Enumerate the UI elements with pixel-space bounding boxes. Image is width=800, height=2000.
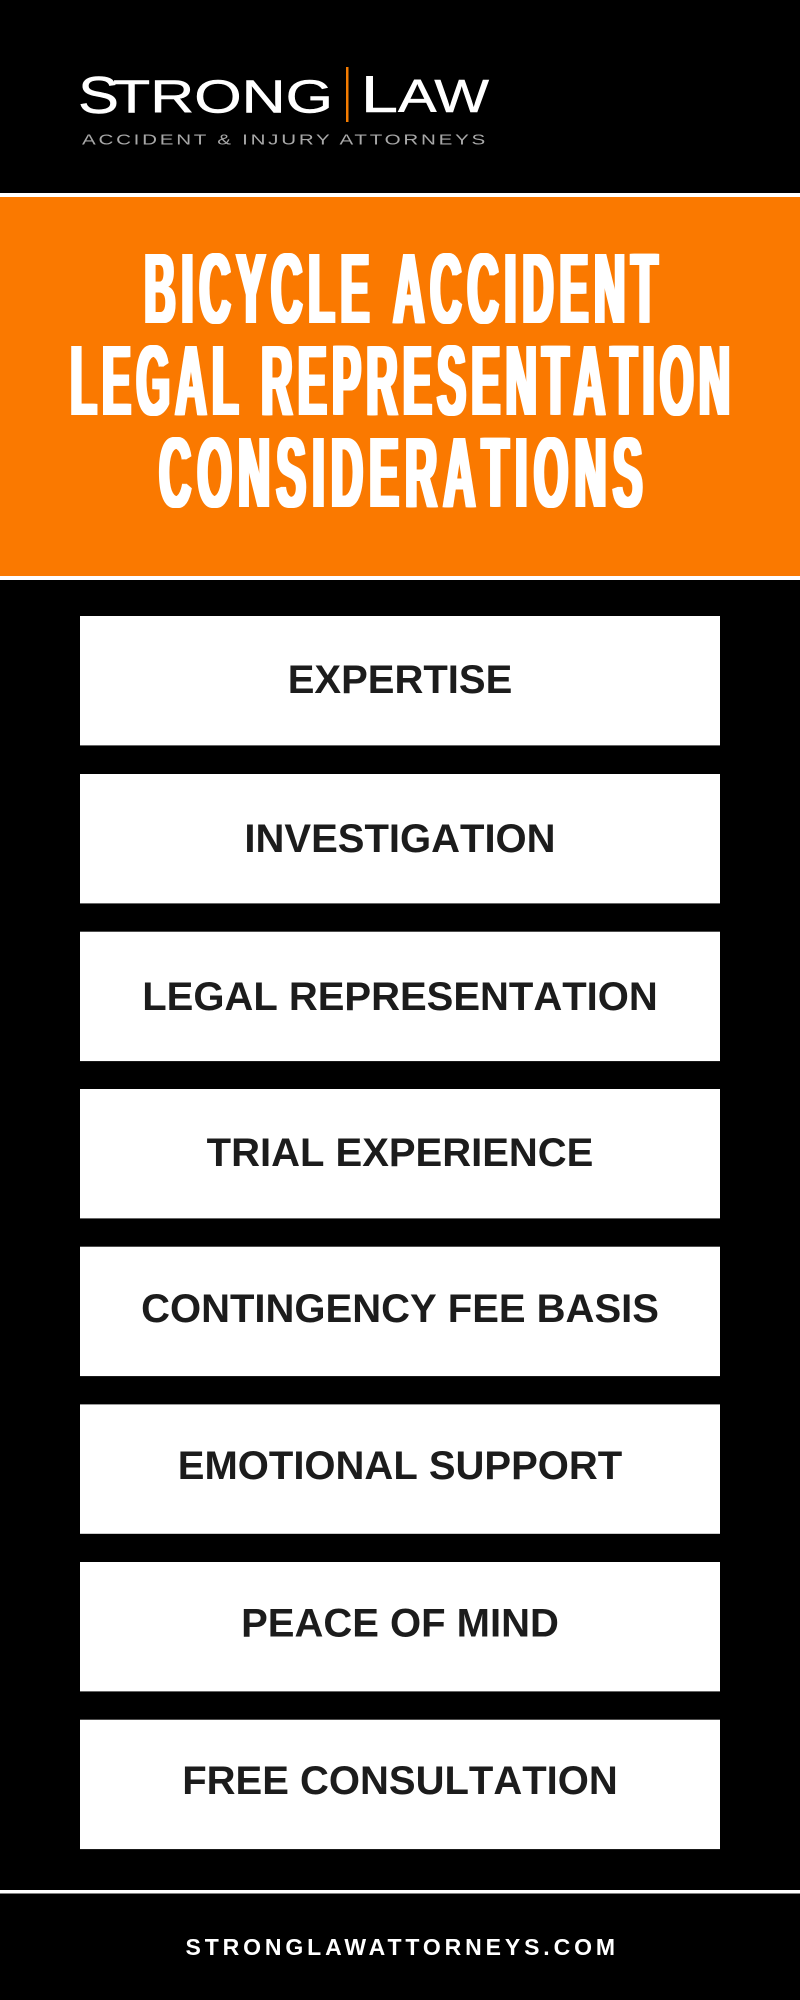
panel: emotional support: EMOTIONAL SUPPORT — [178, 1444, 622, 1488]
title — [70, 233, 735, 529]
footer website: STRONGLAWATTORNEYS.COM — [186, 1934, 615, 1960]
logo tagline: ACCIDENT & INJURY ATTORNEYS — [82, 132, 488, 148]
logo wordmark: Strong: TRONG — [113, 71, 333, 123]
title: CONSIDERATIONS — [159, 417, 649, 529]
title banner — [0, 193, 800, 580]
logo divider — [346, 67, 348, 122]
title: BICYCLE ACCIDENT — [145, 233, 664, 345]
panel: peace of mind: PEACE OF MIND — [241, 1602, 559, 1646]
panel: free consultation — [80, 1720, 720, 1849]
panel: investigation — [80, 774, 720, 903]
logo wordmark: Strong: S — [78, 67, 119, 125]
panel: free consultation: FREE CONSULTATION — [182, 1759, 618, 1803]
panel: trial experience: TRIAL EXPERIENCE — [207, 1131, 593, 1175]
panel: contingency fee basis — [80, 1247, 720, 1376]
panel: investigation: INVESTIGATION — [244, 817, 556, 861]
panel: trial experience — [80, 1089, 720, 1218]
panel: contingency fee basis: CONTINGENCY FEE BASIS — [141, 1287, 659, 1331]
panel: emotional support — [80, 1404, 720, 1534]
panel: expertise: EXPERTISE — [288, 658, 512, 702]
title: LEGAL REPRESENTATION — [70, 325, 735, 437]
panel: peace of mind — [80, 1562, 720, 1691]
logo wordmark: Law: L — [361, 66, 398, 124]
logo wordmark: Law — [361, 66, 490, 124]
logo wordmark: Strong — [78, 67, 333, 125]
panel: legal representation: LEGAL REPRESENTATION — [142, 975, 658, 1019]
panel: legal representation — [80, 932, 720, 1061]
logo: Strong Law — [78, 66, 490, 148]
panel: expertise — [80, 616, 720, 745]
logo wordmark: Law: AW — [398, 70, 490, 122]
